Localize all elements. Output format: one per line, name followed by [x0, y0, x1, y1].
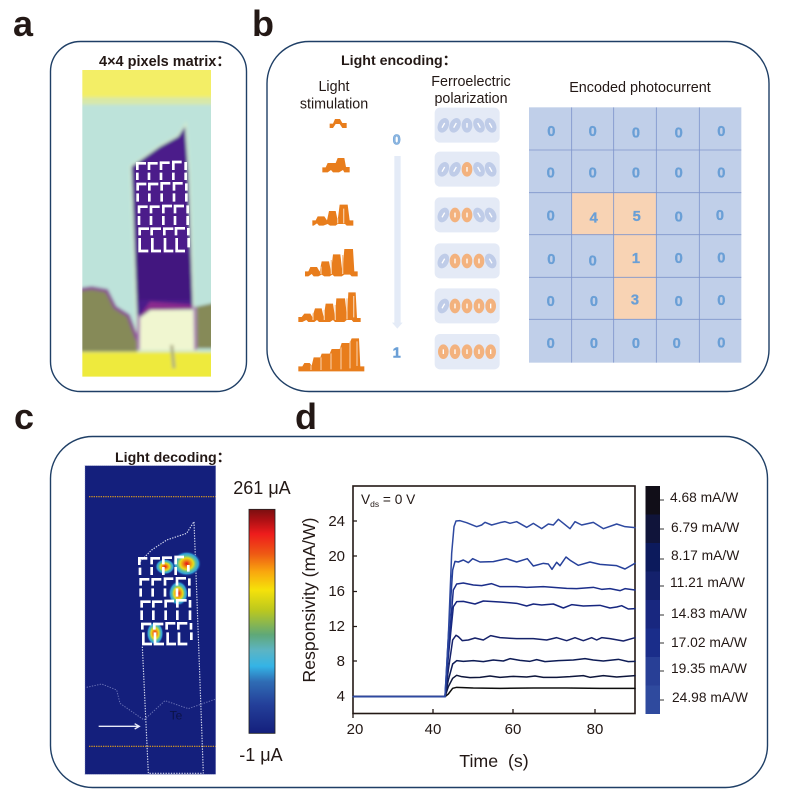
curves	[353, 519, 635, 697]
Vds annotation: = 0 V	[379, 492, 416, 507]
grid digits: 5	[633, 209, 641, 225]
legend labels: 8.17 mA/W	[671, 548, 739, 563]
pulse train 4	[305, 249, 358, 276]
row 1	[435, 108, 500, 143]
legend swatches	[646, 486, 664, 714]
y axis ticks and labels: 16	[328, 583, 345, 600]
legend labels: 24.98 mA/W	[672, 690, 748, 705]
legend labels: 14.83 mA/W	[671, 606, 747, 621]
colorbar maximum label: 261 μA	[233, 478, 291, 498]
line chart: responsivity vs time	[299, 486, 635, 771]
pulse train 1	[330, 119, 347, 128]
Vds annotation: V	[361, 492, 370, 507]
flake outline	[138, 522, 203, 773]
panel label a: a	[13, 3, 34, 44]
grid digits: 0	[547, 294, 555, 310]
grid digits: 0	[547, 165, 555, 181]
colorbar minimum label: -1 μA	[239, 745, 283, 765]
y axis ticks and labels: 8	[337, 653, 345, 670]
panel b: light encoding frame	[267, 42, 769, 392]
heading: Light encoding: Light encoding：	[341, 53, 457, 69]
grid digits: 0	[590, 336, 598, 352]
grid digits: 0	[675, 165, 683, 181]
grid digits: 0	[632, 125, 640, 141]
grid digits: 0	[675, 125, 683, 141]
column heading: Light stimulation: Light	[318, 79, 350, 95]
label 0: 0	[393, 133, 401, 149]
hot spots and pixel grid on map	[139, 551, 201, 645]
light stimulation pulse icons, upper	[312, 119, 353, 226]
grid digits: 0	[717, 293, 725, 309]
column heading: Light stimulation: stimulation	[300, 96, 368, 112]
white pixel grid	[139, 557, 191, 644]
y axis ticks and labels	[328, 513, 595, 718]
y axis ticks and labels: 4	[337, 688, 345, 705]
legend labels: 4.68 mA/W	[670, 490, 738, 505]
grid digits: 0	[675, 210, 683, 226]
light stimulation pulse icons, lower	[298, 249, 364, 371]
grid digits: 0	[547, 209, 555, 225]
heading: Light decoding: Light decoding：	[115, 450, 231, 466]
grid digits: 0	[675, 294, 683, 310]
x axis labels	[347, 721, 603, 738]
grid digits: 0	[716, 208, 724, 224]
white pixel grid on micrograph	[137, 162, 189, 251]
grid digits: 0	[547, 336, 555, 352]
panel c and d: light decoding frame	[50, 436, 768, 788]
y axis ticks and labels: 12	[328, 618, 345, 635]
grid digits: 0	[547, 252, 555, 268]
x axis labels: 80	[587, 721, 603, 738]
panel a: pixel matrix frame	[50, 42, 246, 392]
grid digits: 0	[717, 335, 725, 351]
electrode lines	[89, 497, 216, 746]
micrograph: device optical image	[73, 63, 220, 383]
white arrow	[99, 724, 139, 729]
legend labels: 11.21 mA/W	[670, 575, 745, 590]
grid digits: 0	[717, 251, 725, 267]
grid digits: 0	[632, 336, 640, 352]
grid digits: 0	[717, 124, 725, 140]
legend labels: 17.02 mA/W	[671, 635, 747, 650]
pulse train 5	[298, 292, 361, 322]
encoded photocurrent grid	[529, 107, 741, 363]
grid digits: 0	[673, 336, 681, 352]
panel label b: b	[252, 3, 274, 44]
grid digits	[547, 124, 725, 352]
grid digits: 3	[631, 293, 639, 309]
Vds annotation: ds	[370, 499, 379, 509]
ferroelectric polarization rows	[435, 108, 500, 369]
colorbar: photocurrent scale	[249, 509, 275, 733]
row 5	[435, 288, 500, 323]
grid digits: 0	[717, 165, 725, 181]
photocurrent map	[85, 466, 216, 774]
x axis labels: 20	[347, 721, 363, 738]
y axis title: Responsivity (mA/W)	[299, 517, 319, 683]
legend: responsivity colour scale	[646, 486, 748, 714]
scale arrow from 0 to 1	[392, 133, 403, 362]
grid digits: 0	[589, 124, 597, 140]
pulse train 6	[298, 338, 364, 371]
column heading: Ferroelectric polarization: Ferroelectric	[431, 74, 511, 90]
grid digits: 0	[589, 165, 597, 181]
heading: 4x4 pixels matrix: 4×4 pixels matrix：	[99, 54, 231, 70]
grid digits: 0	[675, 251, 683, 267]
pulse train 3	[312, 205, 353, 226]
legend labels: 19.35 mA/W	[671, 661, 747, 676]
grid digits: 0	[589, 253, 597, 269]
panel label d: d	[295, 396, 317, 437]
column heading: Encoded photocurrent: Encoded photocurrent	[569, 80, 711, 96]
y axis ticks and labels: 24	[328, 513, 345, 530]
legend labels	[670, 490, 748, 705]
grid digits: 0	[590, 294, 598, 310]
column heading: Ferroelectric polarization: polarization	[434, 91, 508, 107]
Te label: Te	[170, 708, 183, 722]
panel label c: c	[14, 396, 34, 437]
x axis labels: 60	[505, 721, 521, 738]
label 1: 1	[393, 346, 401, 362]
y axis ticks and labels: 20	[328, 548, 345, 565]
row 3	[435, 197, 500, 232]
row 6	[435, 334, 500, 369]
x axis labels: 40	[425, 721, 441, 738]
row 4	[435, 243, 500, 278]
legend labels: 6.79 mA/W	[671, 520, 739, 535]
grid digits: 0	[547, 124, 555, 140]
hot spots	[146, 551, 201, 645]
row 2	[435, 152, 500, 187]
x axis title: Time (s)	[459, 751, 529, 771]
grid digits: 4	[590, 210, 599, 226]
grid digits: 0	[632, 165, 640, 181]
plot frame	[353, 486, 635, 714]
pulse train 2	[322, 158, 350, 172]
grid digits: 1	[632, 251, 640, 267]
